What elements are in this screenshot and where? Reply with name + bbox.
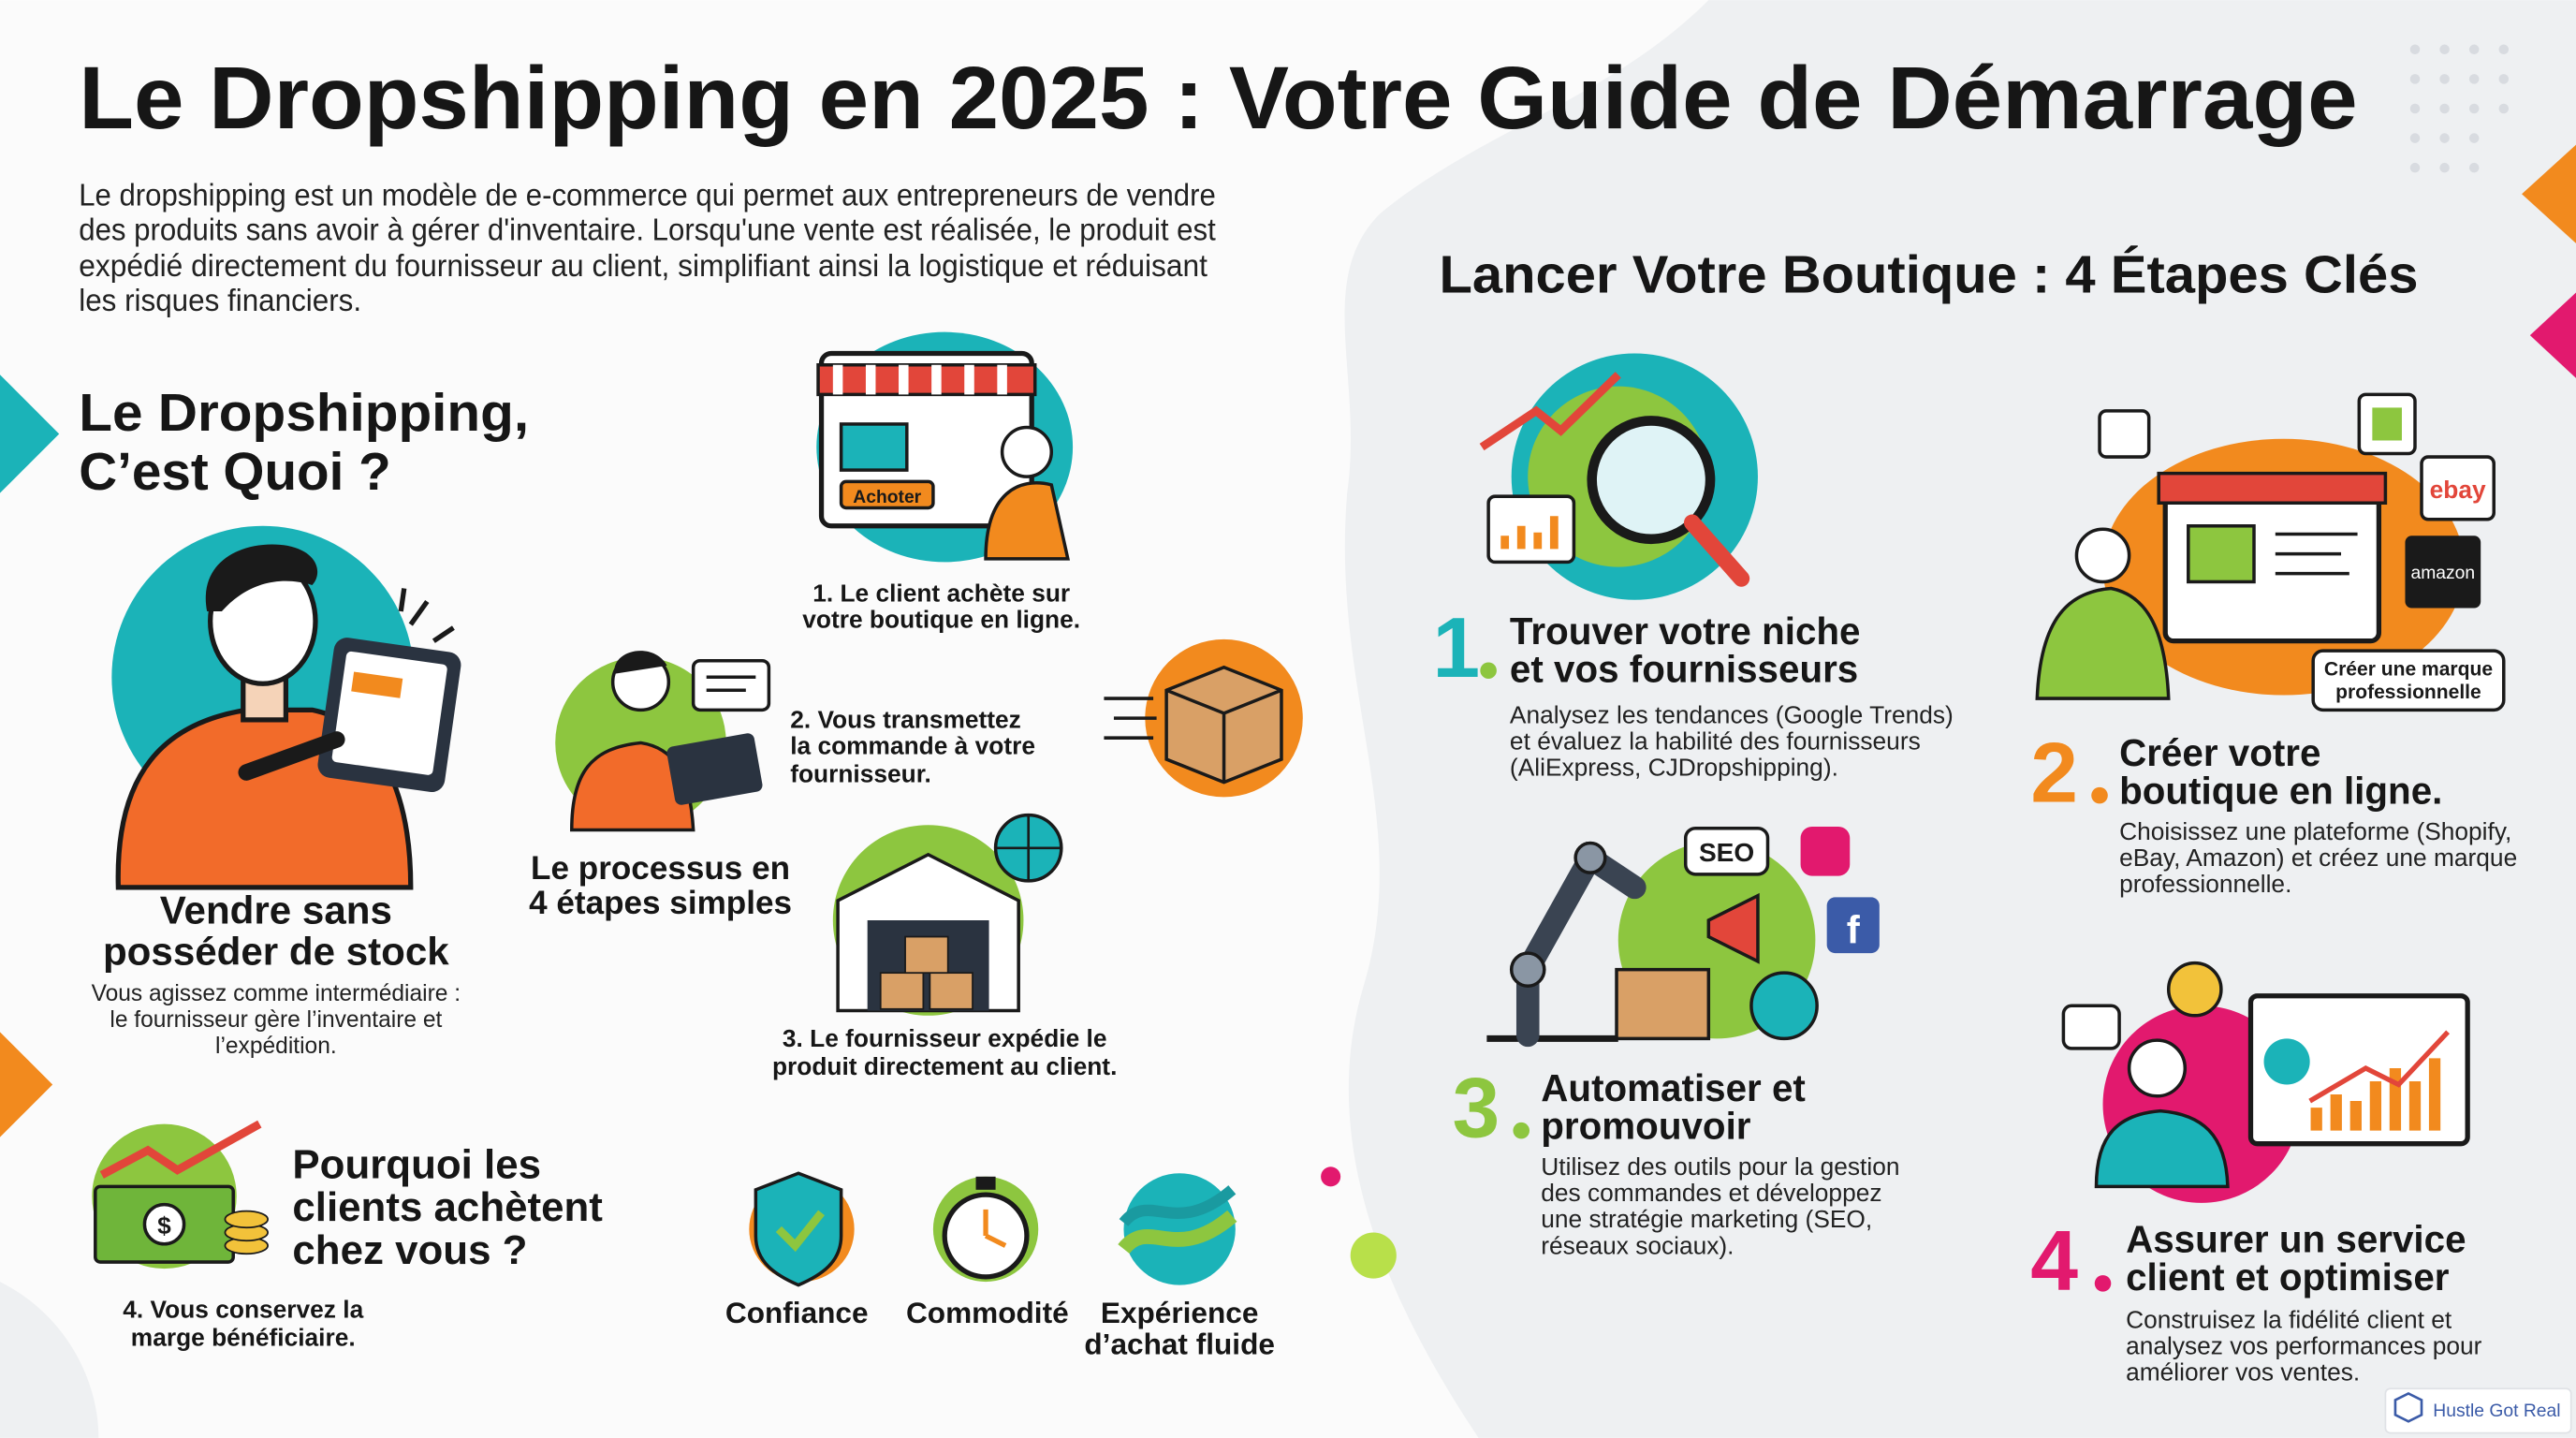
step 1 text: (AliExpress, CJDropshipping). (1510, 754, 1838, 782)
step 3 text: des commandes et développez (1541, 1179, 1882, 1207)
labels: benefits: Commodité (906, 1296, 1069, 1329)
icon: step 2 storefront: Créer une marque (2324, 658, 2493, 680)
step 2 text: 2 (2030, 726, 2078, 821)
step 1 text: 1 (1432, 600, 1480, 696)
step 4 text: Assurer un service (2126, 1218, 2466, 1261)
intro text: les risques financiers. (79, 284, 361, 318)
intro text: des produits sans avoir à gérer d'inventaire. Lorsqu'une vente est réalisée, le produit est (79, 213, 1216, 247)
text: process in 4 steps (529, 850, 792, 921)
icon: warehouse (833, 815, 1061, 1016)
icon: online storefront: Achoter (853, 488, 922, 507)
step 1 text: et vos fournisseurs (1510, 648, 1858, 691)
text: process in 4 steps: Le processus en (531, 850, 790, 887)
labels: benefits: Confiance (725, 1296, 869, 1329)
intro text (79, 179, 1216, 318)
text: sell without stock: l’expédition. (215, 1034, 337, 1059)
heading: why customers buy: Pourquoi les (292, 1142, 541, 1188)
icon: step 3 automation (1486, 827, 1880, 1038)
step 4 text (2030, 1213, 2482, 1386)
icon: step 2 storefront: ebay (2430, 476, 2486, 504)
text: step 4: marge bénéficiaire. (131, 1324, 356, 1352)
text: step 4: 4. Vous conservez la (123, 1296, 364, 1324)
heading: why customers buy (292, 1142, 603, 1273)
text: step 2: 2. Vous transmettez (790, 706, 1021, 734)
icon: online storefront (816, 332, 1073, 562)
icon: step 1 globe search (1482, 353, 1758, 600)
icon: person sending order (555, 651, 768, 829)
icon: step 4 service dashboard (2063, 963, 2467, 1203)
step 1 text (1432, 600, 1954, 782)
icon: money growth (92, 1124, 268, 1269)
step 2 text: eBay, Amazon) et créez une marque (2119, 844, 2517, 872)
step 2 text: professionnelle. (2119, 870, 2291, 898)
heading: what is dropshipping: Le Dropshipping, (79, 383, 529, 442)
text: sell without stock: posséder de stock (103, 929, 449, 973)
step 3 text: une stratégie marketing (SEO, (1541, 1205, 1872, 1233)
decoration: dots (2410, 45, 2509, 172)
step 2 text: Choisissez une plateforme (Shopify, (2119, 817, 2511, 845)
labels: benefits (725, 1296, 1275, 1360)
heading: why customers buy: clients achètent (292, 1184, 603, 1230)
text: step 2: la commande à votre (790, 732, 1035, 760)
icon: parcel box (1104, 639, 1303, 797)
labels: benefits: d’achat fluide (1084, 1327, 1275, 1360)
heading: why customers buy: chez vous ? (292, 1227, 527, 1273)
text: step 1: votre boutique en ligne. (802, 606, 1080, 634)
heading: what is dropshipping (79, 383, 529, 501)
step 4 text: analysez vos performances pour (2126, 1331, 2482, 1359)
icon: step 3 automation: SEO (1699, 838, 1754, 867)
title: Le Dropshipping en 2025 : Votre Guide de Démarrage (79, 49, 2358, 148)
intro text: Le dropshipping est un modèle de e-commerce qui permet aux entrepreneurs de vendre (79, 179, 1216, 213)
step 4 text: Construisez la fidélité client et (2126, 1305, 2452, 1333)
icon: step 2 storefront: amazon (2411, 564, 2475, 583)
text: step 2: fournisseur. (790, 760, 931, 788)
step 1 text: Analysez les tendances (Google Trends) (1510, 700, 1954, 728)
text: process in 4 steps: 4 étapes simples (529, 885, 792, 921)
step 3 text: Utilisez des outils pour la gestion (1541, 1152, 1899, 1181)
step 2 text (2030, 726, 2517, 898)
step 1 text: Trouver votre niche (1510, 609, 1861, 653)
icon: smooth waves (1123, 1173, 1236, 1285)
text: step 1 (802, 580, 1080, 634)
heading: what is dropshipping: C’est Quoi ? (79, 442, 391, 501)
text: step 2 (790, 706, 1035, 788)
text: step 4 (123, 1296, 364, 1352)
step 4 text: 4 (2030, 1213, 2078, 1309)
step 1 text: et évaluez la habilité des fournisseurs (1510, 726, 1921, 755)
icon: trust shield (749, 1173, 855, 1285)
text: sell without stock: le fournisseur gère l’inventaire et (110, 1007, 443, 1033)
step 2 text: boutique en ligne. (2119, 769, 2442, 812)
step 3 text (1453, 1061, 1899, 1259)
step 3 text: Automatiser et (1541, 1066, 1806, 1109)
icon: money growth: $ (157, 1211, 171, 1240)
text: step 3 (772, 1024, 1117, 1080)
labels: benefits: Expérience (1101, 1296, 1258, 1329)
text: sell without stock (92, 888, 461, 1059)
step 3 text: 3 (1453, 1061, 1500, 1156)
step 4 text: client et optimiser (2126, 1255, 2450, 1299)
step 3 text: réseaux sociaux). (1541, 1231, 1734, 1259)
text: step 3: 3. Le fournisseur expédie le (783, 1024, 1106, 1052)
icon: step 2 storefront (2037, 394, 2504, 710)
text: sell without stock: Vendre sans (160, 888, 392, 932)
intro text: expédié directement du fournisseur au client, simplifiant ainsi la logistique et réduisant (79, 249, 1208, 284)
text: sell without stock: Vous agissez comme intermédiaire : (92, 981, 461, 1006)
icon: step 3 automation: f (1847, 908, 1861, 952)
icon: step 2 storefront: professionnelle (2335, 682, 2481, 703)
step 3 text: promouvoir (1541, 1104, 1751, 1147)
step 2 text: Créer votre (2119, 731, 2320, 774)
edge triangles (0, 145, 2576, 1279)
watermark: Hustle Got Real (2433, 1401, 2561, 1421)
text: step 1: 1. Le client achète sur (812, 580, 1070, 608)
heading: right: Lancer Votre Boutique : 4 Étapes Clés (1439, 245, 2419, 304)
icon: seller with tablet (111, 526, 462, 888)
step 4 text: améliorer vos ventes. (2126, 1357, 2360, 1386)
text: step 3: produit directement au client. (772, 1052, 1117, 1080)
watermark (2385, 1388, 2571, 1433)
icon: stopwatch (933, 1177, 1038, 1282)
